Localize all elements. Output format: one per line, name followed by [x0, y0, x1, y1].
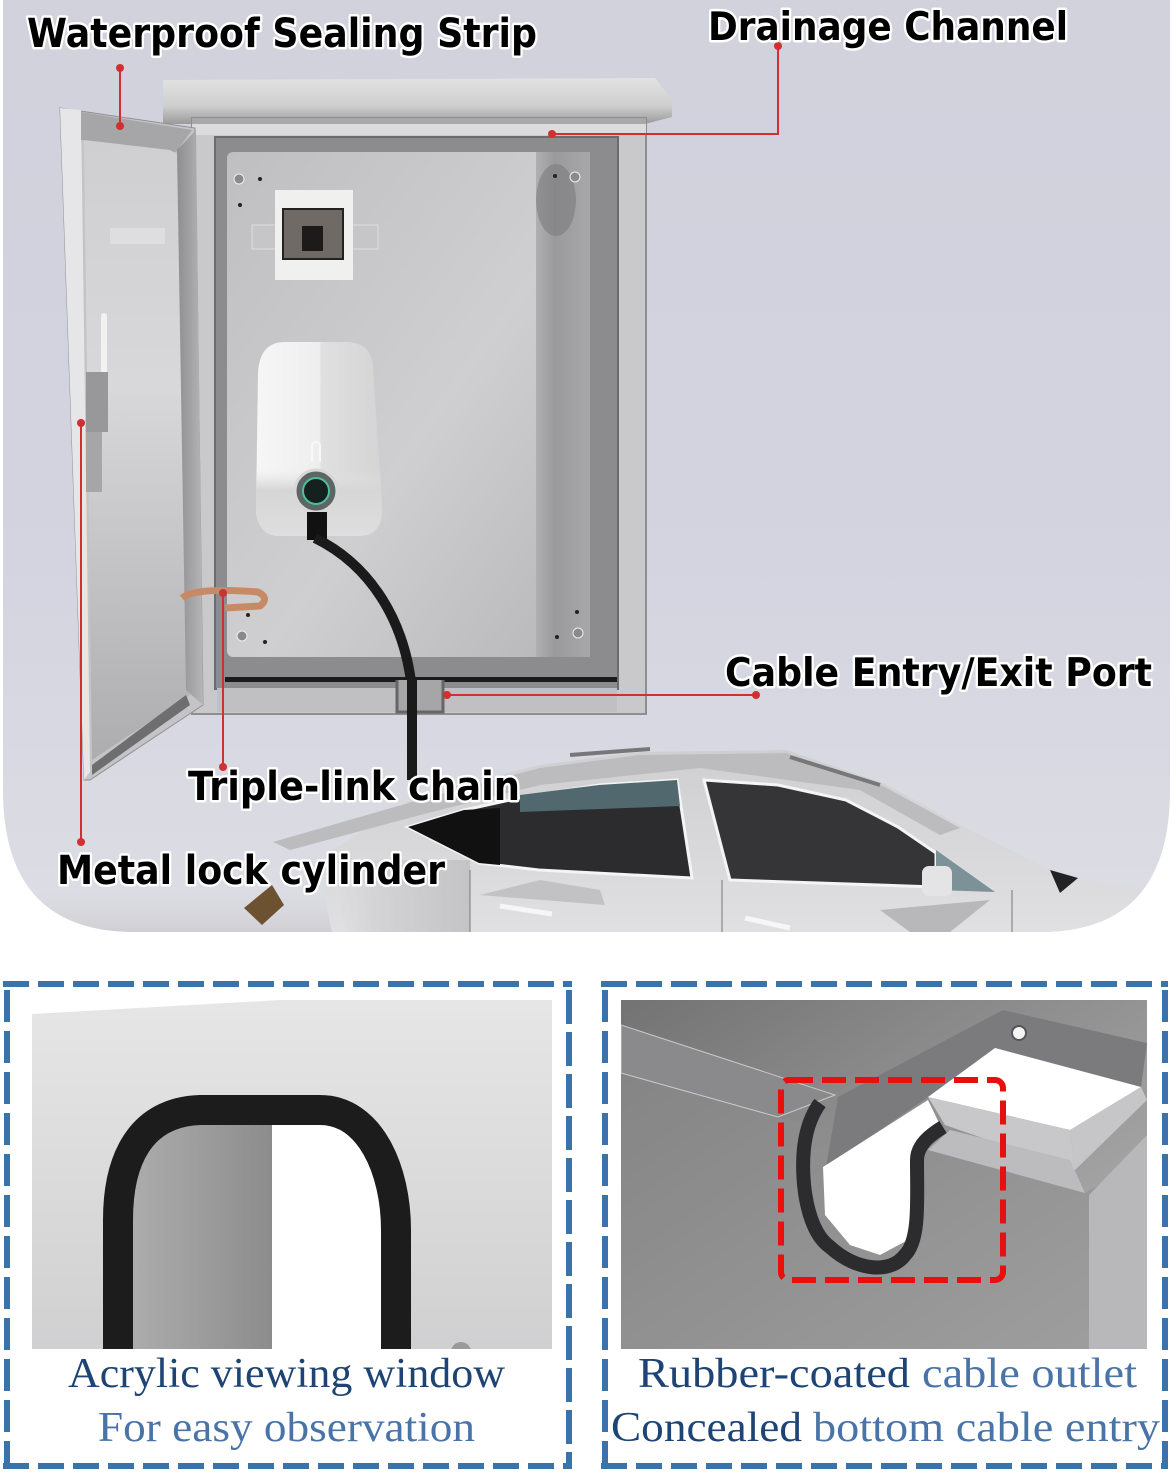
callout: triple-link chain line	[219, 589, 227, 771]
door	[60, 108, 203, 780]
gasket	[215, 137, 618, 689]
panel: hero enclosure photo	[3, 0, 1170, 932]
roof canopy	[163, 78, 672, 124]
cable	[312, 534, 416, 677]
callout: cable port line	[443, 691, 760, 699]
dashed frame left	[3, 984, 572, 1466]
caption: concealed bottom cable entry: bottom cable entry	[813, 1405, 1160, 1451]
photo: acrylic window	[32, 1000, 552, 1362]
heading: Waterproof Sealing Strip: Waterproof Sealing Strip	[27, 11, 537, 57]
enclosure	[60, 78, 672, 780]
heading: Drainage Channel: Drainage Channel	[708, 5, 1068, 50]
back plate	[227, 152, 536, 657]
panel: acrylic viewing window	[3, 984, 572, 1466]
caption: concealed bottom cable entry: Concealed	[611, 1405, 802, 1451]
dashed frame right	[601, 984, 1168, 1466]
door handle	[101, 313, 107, 372]
charger	[256, 342, 382, 540]
heading: Triple-link chain: Triple-link chain	[188, 764, 520, 810]
breaker box	[252, 190, 378, 280]
caption: for easy observation: For easy observation	[98, 1405, 475, 1451]
caption: rubber-coated cable outlet: Rubber-coated	[638, 1351, 910, 1397]
caption: acrylic viewing window: Acrylic viewing window	[68, 1351, 506, 1397]
car	[244, 749, 1170, 932]
red dashed highlight	[781, 1080, 1003, 1280]
callout: drainage channel line	[548, 42, 782, 138]
photo: cable outlet	[621, 1000, 1147, 1349]
panel: rubber-coated cable outlet	[601, 984, 1168, 1466]
cabinet body	[192, 118, 646, 714]
copper chain	[182, 590, 265, 608]
callout: waterproof sealing strip line	[116, 64, 124, 130]
caption: rubber-coated cable outlet: cable outlet	[922, 1351, 1137, 1397]
heading: Cable Entry/Exit Port: Cable Entry/Exit Port	[725, 651, 1152, 696]
callout: metal lock line	[77, 419, 85, 846]
heading: Metal lock cylinder: Metal lock cylinder	[57, 848, 445, 894]
cable port	[397, 680, 443, 712]
screw studs	[234, 172, 583, 641]
